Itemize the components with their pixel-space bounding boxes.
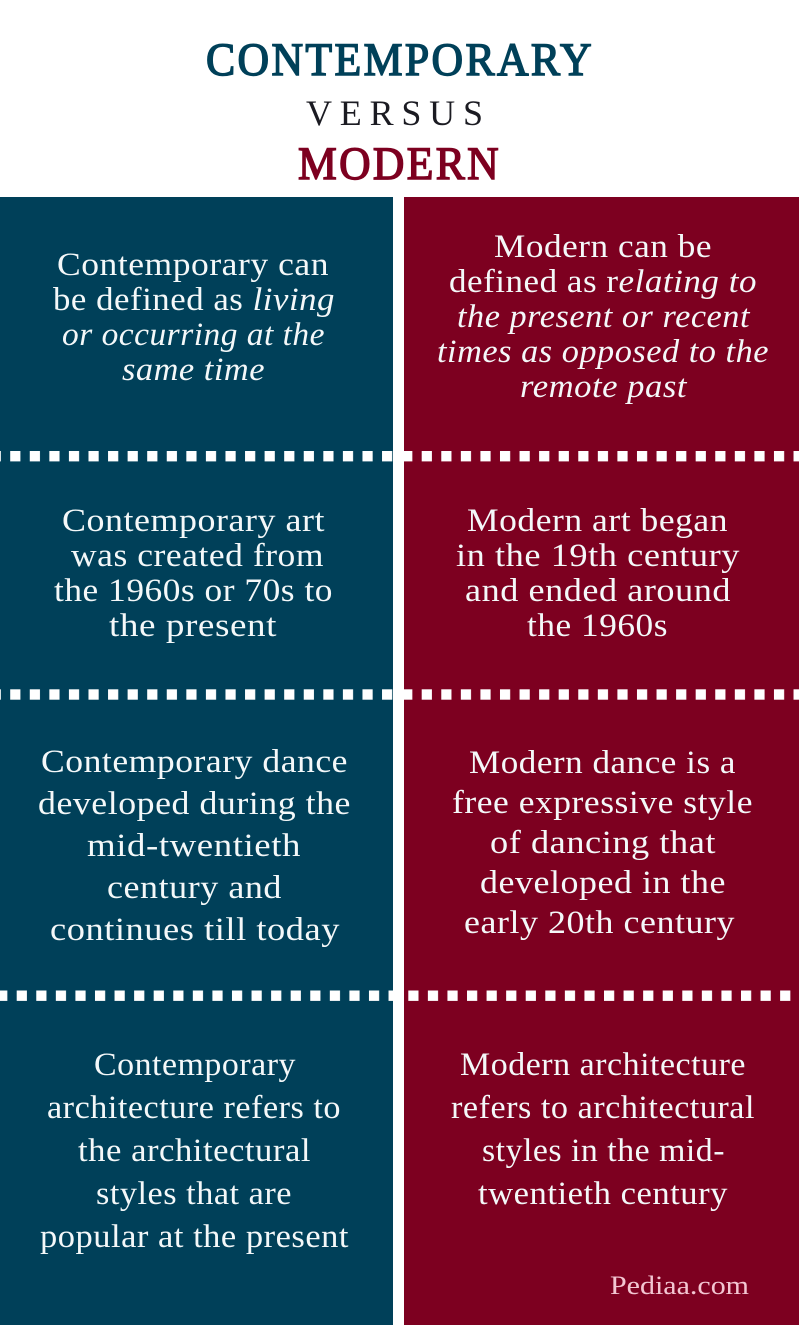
text: contemporary definition: Contemporary can [57, 247, 329, 283]
text: modern art: the 1960s [527, 608, 668, 644]
text: modern architecture: styles in the mid- [482, 1133, 725, 1169]
text: modern architecture [451, 1047, 755, 1212]
text: modern definition: remote past [520, 369, 687, 405]
text: contemporary dance: developed during the [38, 786, 351, 822]
title: Contemporary versus Modern [206, 35, 594, 190]
text: modern dance [452, 745, 753, 941]
text: contemporary architecture: styles that are [96, 1176, 292, 1212]
watermark: Pediaa.com: Pediaa.com [610, 1271, 749, 1300]
text: contemporary dance: century and [107, 870, 282, 906]
text: modern dance: early 20th century [464, 905, 735, 941]
text: modern architecture: twentieth century [478, 1176, 728, 1212]
heading: versus: VERSUS [306, 93, 483, 133]
text: modern art: in the 19th century [456, 538, 740, 574]
text: contemporary definition: same time [122, 352, 265, 388]
text: contemporary architecture: architecture refers to [47, 1090, 341, 1126]
text: contemporary dance [38, 744, 351, 948]
text: modern dance: of dancing that [490, 825, 716, 861]
row divider 2 [0, 689, 799, 700]
heading: Modern: MODERN [298, 139, 501, 190]
text: contemporary art: Contemporary art [62, 503, 325, 539]
text: modern definition: Modern can be [494, 229, 712, 265]
text: contemporary architecture: the architectural [78, 1133, 311, 1169]
text: contemporary architecture: popular at the present [40, 1219, 349, 1255]
text: contemporary art: the present [109, 608, 277, 644]
panel: modern column [404, 197, 799, 1325]
text: contemporary art: was created from [71, 538, 324, 574]
panel: contemporary column [0, 197, 393, 1325]
text: contemporary dance: continues till today [50, 912, 340, 948]
text: modern architecture: refers to architectural [451, 1090, 755, 1126]
heading: Contemporary: CONTEMPORARY [206, 35, 594, 86]
text: contemporary dance: mid-twentieth [87, 828, 301, 864]
row divider 3 [0, 990, 799, 1001]
text: modern definition [437, 229, 769, 405]
text: modern dance: Modern dance is a [469, 745, 736, 781]
text: contemporary definition [53, 247, 335, 388]
text: contemporary dance: Contemporary dance [41, 744, 348, 780]
text: modern definition: times as opposed to the [437, 334, 769, 370]
text: contemporary definition: or occurring at the [62, 317, 325, 353]
text: modern art: Modern art began [467, 503, 728, 539]
text: contemporary art: the 1960s or 70s to [54, 573, 333, 609]
text: modern art [456, 503, 740, 644]
text: modern definition: defined as r elating to [449, 264, 757, 300]
text: modern dance: free expressive style [452, 785, 753, 821]
text: contemporary definition: be defined as living [53, 282, 335, 318]
text: modern art: and ended around [465, 573, 731, 609]
text: contemporary architecture: Contemporary [94, 1047, 296, 1083]
text: contemporary art [54, 503, 333, 644]
text: contemporary architecture [40, 1047, 349, 1255]
row divider 1 [0, 451, 799, 461]
text: modern architecture: Modern architecture [460, 1047, 746, 1083]
text: modern definition: the present or recent [457, 299, 750, 335]
text: modern dance: developed in the [480, 865, 726, 901]
